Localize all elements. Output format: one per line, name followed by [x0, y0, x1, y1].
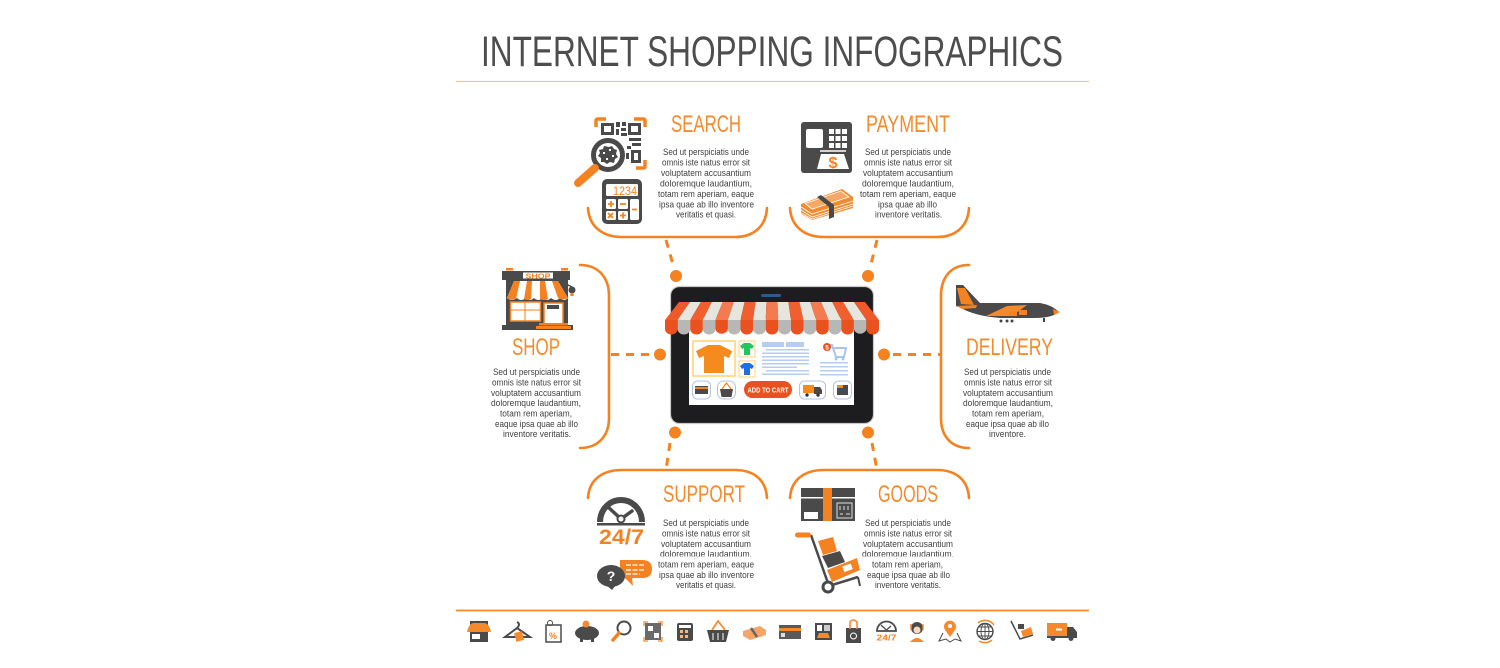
- shop body text: eaque ipsa quae ab illo: [495, 418, 578, 429]
- icon: atm: $: [829, 155, 838, 172]
- heading: support: SUPPORT: [663, 481, 745, 508]
- main t-shirt: [693, 341, 735, 376]
- search body text: veritatis et quasi.: [676, 209, 736, 220]
- delivery body text: Sed ut perspiciatis unde: [964, 366, 1051, 377]
- connector: support: [666, 426, 681, 470]
- payment body text: [860, 146, 956, 220]
- goods body text: Sed ut perspiciatis unde: [865, 517, 951, 528]
- support body text: Sed ut perspiciatis unde: [663, 517, 749, 528]
- icon: hanger: [505, 622, 530, 642]
- support body text: veritatis et quasi.: [676, 579, 736, 590]
- delivery body text: totam rem aperiam,: [972, 408, 1044, 419]
- icon: calculator: [602, 179, 642, 224]
- support body text: doloremque laudantium,: [660, 548, 752, 559]
- heading: goods: GOODS: [878, 481, 938, 508]
- icon: atm: [801, 122, 852, 173]
- shopping cart badge: [823, 343, 846, 360]
- icon: shop building: [502, 268, 576, 330]
- delivery body text: doloremque laudantium,: [963, 397, 1053, 408]
- panel: goods: [790, 470, 969, 592]
- icon: parcel box: [801, 488, 855, 521]
- heading: payment: PAYMENT: [866, 111, 950, 138]
- search body text: ipsa quae ab illo inventore: [659, 198, 754, 209]
- delivery body text: omnis iste natus error sit: [964, 376, 1052, 387]
- panel: delivery: [941, 265, 1060, 448]
- icon: credit card: [779, 625, 801, 639]
- support body text: [658, 517, 754, 590]
- icon: qr code with magnifier: [578, 119, 645, 183]
- icon: calculator: [677, 623, 693, 641]
- goods body text: omnis iste natus error sit: [864, 527, 952, 538]
- payment body text: omnis iste natus error sit: [864, 156, 952, 167]
- icon: chat bubbles: [597, 560, 652, 590]
- shop body text: voluptatem accusantium: [491, 387, 581, 398]
- icon: hand truck: [1011, 621, 1033, 639]
- shop bracket: [580, 265, 609, 448]
- goods body text: doloremque laudantium,: [862, 548, 954, 559]
- support body text: voluptatem accusantium: [661, 538, 751, 549]
- product description lines: [762, 342, 809, 375]
- icon: hand truck with boxes: [795, 532, 860, 592]
- support body text: totam rem aperiam, eaque: [658, 558, 754, 569]
- delivery body text: inventore.: [989, 428, 1026, 439]
- icon: shop: [467, 621, 491, 642]
- search body text: omnis iste natus error sit: [662, 156, 750, 167]
- icon: cash stack: [801, 189, 853, 220]
- heading: delivery: DELIVERY: [966, 334, 1053, 361]
- icon: basket: [707, 621, 729, 642]
- connector: shop: [611, 348, 666, 360]
- search body text: Sed ut perspiciatis unde: [663, 146, 749, 157]
- panel: search: [578, 111, 767, 237]
- connector: search: [666, 240, 682, 282]
- icon: map pin: [939, 621, 961, 642]
- heading: shop: SHOP: [512, 334, 560, 361]
- payment bracket: [790, 208, 969, 237]
- panel: shop: [491, 265, 609, 448]
- search body text: totam rem aperiam, eaque: [658, 188, 754, 199]
- shop body text: Sed ut perspiciatis unde: [493, 366, 580, 377]
- goods body text: voluptatem accusantium: [863, 538, 953, 549]
- search body text: [658, 146, 754, 220]
- payment body text: totam rem aperiam, eaque: [860, 188, 956, 199]
- button icons row: [692, 381, 852, 399]
- connector: goods: [862, 426, 877, 470]
- bottom divider: [456, 610, 1089, 612]
- icon: magnifier: [613, 622, 630, 640]
- add to cart button: [744, 381, 792, 398]
- icon: atm: [815, 623, 832, 640]
- icon: shop building: SHOP: [526, 273, 551, 280]
- icon: delivery truck: [1047, 623, 1077, 641]
- icon: support agent: [910, 622, 924, 642]
- icon: qr code: [644, 622, 662, 641]
- payment body text: ipsa quae ab illo: [878, 198, 937, 209]
- search body text: voluptatem accusantium: [661, 167, 751, 178]
- icon: 24/7: 24/7: [876, 634, 897, 642]
- goods body text: inventore veritatis.: [875, 579, 941, 590]
- blue t-shirt: [739, 361, 755, 377]
- icon: 24/7: [876, 622, 897, 642]
- support body text: ipsa quae ab illo inventore: [659, 569, 754, 580]
- green t-shirt: [739, 341, 755, 357]
- delivery body text: voluptatem accusantium: [963, 387, 1053, 398]
- shop body text: inventore veritatis.: [503, 428, 571, 439]
- icon: piggy bank: [575, 620, 599, 642]
- shopping cart badge: 5: [825, 344, 829, 352]
- tablet storefront: [665, 286, 879, 424]
- icon: calculator: 1234: [613, 184, 637, 198]
- connector: payment: [862, 240, 877, 282]
- support bracket: [588, 470, 767, 498]
- icon: cash: [743, 626, 766, 640]
- search bracket: [588, 208, 767, 237]
- payment body text: inventore veritatis.: [875, 209, 942, 220]
- icon: globe: [977, 620, 994, 643]
- awning: [665, 302, 879, 335]
- shop body text: omnis iste natus error sit: [492, 376, 581, 387]
- goods body text: totam rem aperiam,: [872, 558, 943, 569]
- icon: 24/7 gauge: [597, 500, 645, 549]
- goods bracket: [790, 470, 969, 498]
- delivery bracket: [941, 265, 969, 448]
- tablet screen: [689, 318, 854, 405]
- shop body text: totam rem aperiam,: [500, 408, 572, 419]
- connector: delivery: [878, 348, 941, 360]
- shop body text: [491, 366, 581, 439]
- icon: shopping bag: [846, 620, 861, 643]
- goods body text: eaque ipsa quae ab illo: [867, 569, 950, 580]
- tablet body: [670, 286, 874, 424]
- panel: support: [588, 470, 767, 590]
- icon: discount tag: [546, 620, 561, 642]
- icon: chat bubbles: ?: [607, 568, 615, 584]
- panel: payment: [790, 111, 969, 237]
- payment body text: voluptatem accusantium: [863, 167, 953, 178]
- product spec lines: [820, 362, 848, 376]
- goods body text: [862, 517, 954, 590]
- shop body text: doloremque laudantium,: [491, 397, 581, 408]
- support body text: omnis iste natus error sit: [662, 527, 750, 538]
- add to cart button: ADD TO CART: [748, 388, 789, 394]
- payment body text: Sed ut perspiciatis unde: [865, 146, 951, 157]
- icon: discount tag: %: [549, 631, 557, 641]
- icon: cargo plane: [956, 285, 1060, 322]
- bottom icon strip: [467, 620, 1077, 643]
- search body text: doloremque laudantium,: [660, 177, 752, 188]
- icon: 24/7 gauge: 24/7: [599, 526, 644, 549]
- payment body text: doloremque laudantium,: [862, 177, 954, 188]
- delivery body text: eaque ipsa quae ab illo: [966, 418, 1049, 429]
- heading: search: SEARCH: [671, 111, 741, 138]
- delivery body text: [963, 366, 1053, 439]
- title: INTERNET SHOPPING INFOGRAPHICS: [481, 28, 1063, 76]
